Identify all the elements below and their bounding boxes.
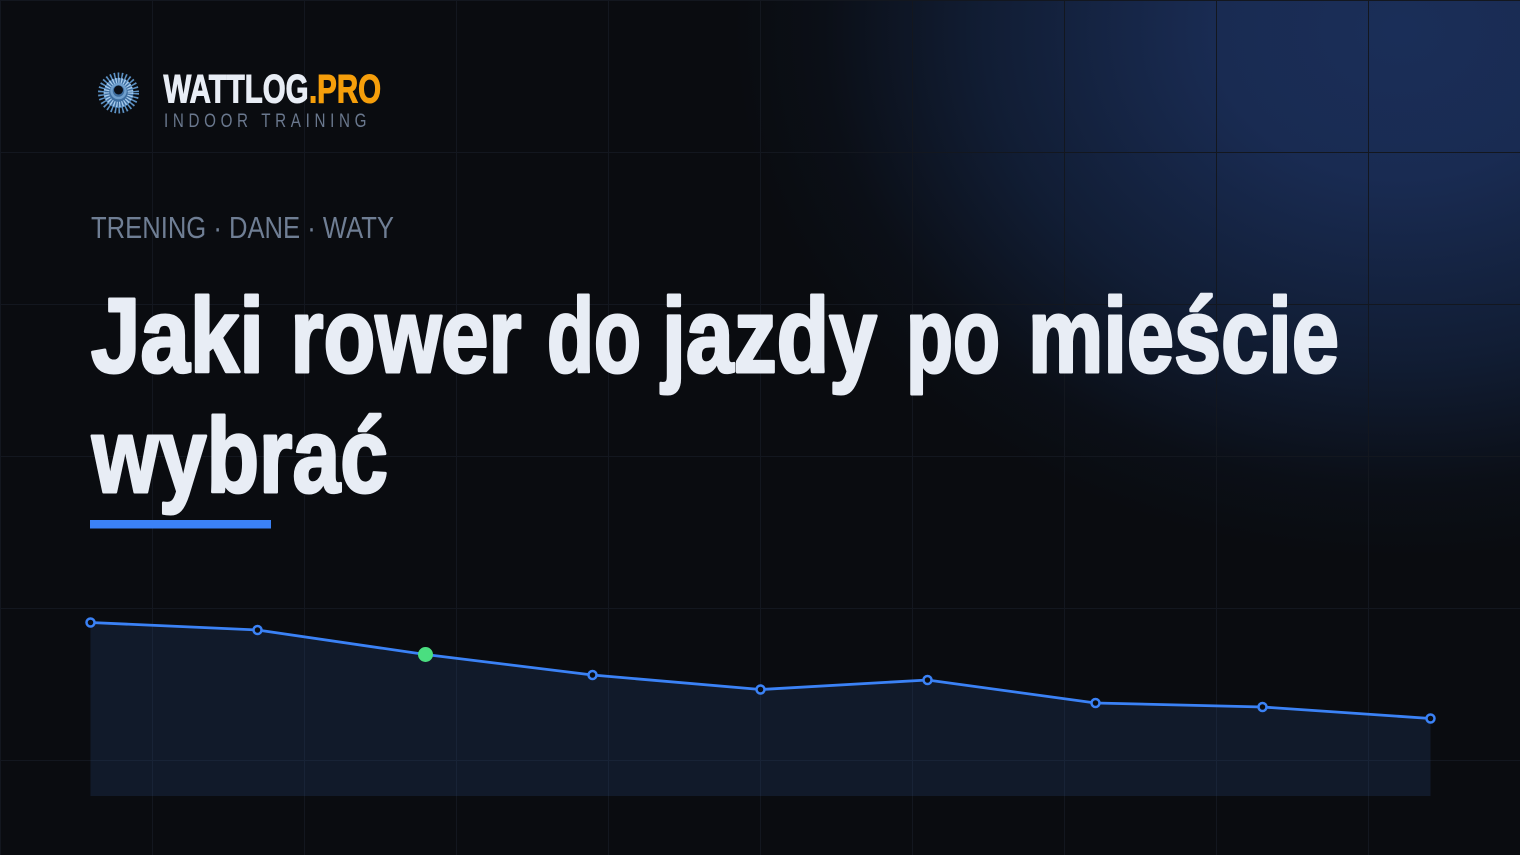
highlighted marker	[418, 647, 433, 662]
title: jazdy	[660, 277, 877, 395]
chart line	[90, 622, 1430, 718]
title	[91, 277, 1339, 515]
chart markers	[86, 618, 1434, 722]
logo icon: cassette sprocket	[102, 76, 136, 110]
title underline	[90, 520, 271, 528]
logo wordmark: .PRO	[309, 68, 381, 112]
logo wordmark: WATTLOG	[164, 68, 308, 112]
title: rower	[290, 277, 522, 395]
title: wybrać	[91, 397, 388, 515]
title: po	[906, 277, 1000, 395]
title: do	[547, 277, 641, 395]
chart area	[90, 622, 1430, 796]
title: mieście	[1028, 277, 1339, 395]
eyebrow: TRENING · DANE · WATY	[91, 210, 394, 245]
logo tagline: INDOOR TRAINING	[164, 109, 366, 131]
title: Jaki	[91, 277, 264, 395]
line chart	[86, 618, 1434, 796]
